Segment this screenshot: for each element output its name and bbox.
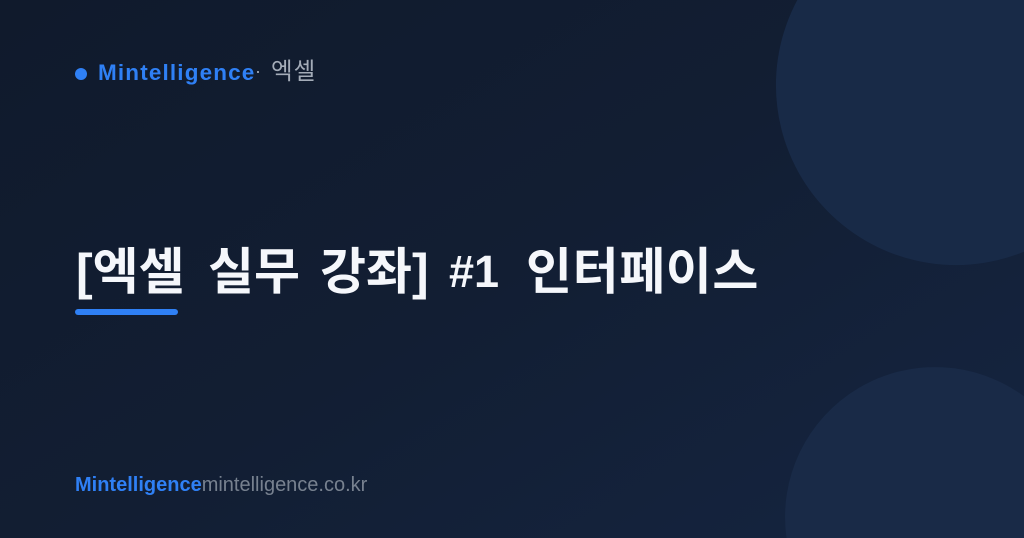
separator: · (255, 61, 261, 81)
decorative circle: bottom right (785, 367, 1024, 538)
title: #1 (449, 246, 499, 297)
title: 인터페이스 (526, 244, 759, 300)
title underline (75, 309, 178, 315)
brand name: Mintelligence (98, 60, 255, 85)
title: [엑셀 (76, 244, 185, 300)
title: 강좌] (320, 244, 429, 300)
title (76, 244, 759, 300)
decorative circle: top right (776, 0, 1024, 265)
title: 실무 (208, 244, 300, 300)
category: 엑셀 (271, 58, 316, 84)
brand header (75, 58, 316, 85)
icon: blue dot (75, 68, 87, 80)
footer: Mintelligencemintelligence.co.kr (75, 474, 367, 496)
